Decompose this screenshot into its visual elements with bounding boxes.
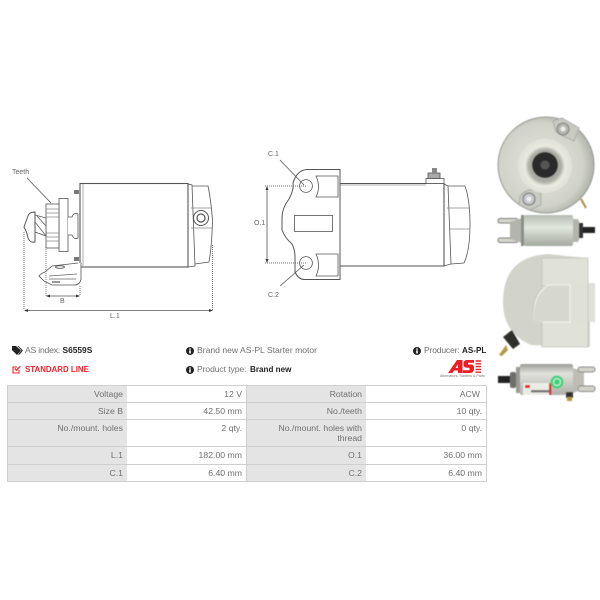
row: Voltage / Rotation: 12 V [224, 389, 242, 399]
technical drawing: front view with C.1, C.2 and O.1 dimensions [265, 160, 470, 286]
row: Size B / No./teeth [8, 403, 486, 419]
technical drawing: side view with teeth, B and L.1 dimensions [24, 178, 213, 312]
row: mount holes [8, 420, 486, 446]
dimension B [46, 247, 80, 298]
row: Voltage / Rotation [8, 386, 486, 402]
row: Size B / No./teeth: Size B [98, 406, 123, 416]
info row: AS index: AS index: [25, 345, 60, 355]
row: C.1 / C.2 [8, 465, 486, 481]
row: Voltage / Rotation: Rotation [330, 389, 362, 399]
info row: product type [186, 364, 292, 374]
row: Voltage / Rotation: Voltage [94, 389, 123, 399]
motor body [80, 184, 212, 267]
teeth leader line [27, 178, 51, 203]
label: B: B [60, 298, 65, 305]
label: Teeth: Teeth [12, 169, 29, 176]
label: L.1: L.1 [110, 313, 120, 320]
motor body [340, 184, 470, 266]
row: mount holes: No./mount. holes [57, 423, 123, 433]
mount hole C.2 [300, 257, 312, 269]
mounting flange [282, 170, 340, 280]
product photos column [496, 116, 596, 402]
info row: standard line: STANDARD LINE [25, 365, 89, 374]
info row: AS index: S6559S [62, 345, 92, 355]
photo: motor end view with pinion [498, 117, 594, 213]
label: O.1: O.1 [254, 220, 265, 227]
row: mount holes: thread [337, 433, 362, 443]
top terminal [426, 168, 444, 184]
row: L.1 / O.1: 182.00 mm [199, 450, 242, 460]
info row: producer: Producer: [424, 345, 459, 355]
row: L.1 / O.1: O.1 [348, 450, 362, 460]
row: C.1 / C.2: C.2 [348, 468, 362, 478]
info row: producer [413, 345, 486, 355]
row: Size B / No./teeth: No./teeth [327, 406, 362, 416]
pinion and teeth [24, 184, 80, 268]
dimension L.1 [24, 232, 213, 312]
leader lines C.1 and C.2 [280, 160, 304, 286]
dimension O.1 [265, 186, 306, 263]
row: C.1 / C.2: 6.40 mm [208, 468, 242, 478]
info row: producer: AS-PL [462, 346, 486, 355]
label: C.2: C.2 [268, 292, 279, 299]
row: C.1 / C.2: C.1 [109, 468, 123, 478]
icon: tags [12, 346, 23, 355]
photo: motor rear view with terminal [499, 254, 595, 356]
info row: AS index [12, 345, 92, 355]
mount hole C.1 [300, 180, 312, 192]
row: mount holes: No./mount. holes with [278, 423, 362, 433]
row: mount holes: 0 qty. [461, 423, 482, 433]
logo: AS: Alternators, Starters & Parts [440, 374, 485, 378]
specifications table [7, 385, 487, 482]
flange cutouts [294, 176, 338, 276]
row: C.1 / C.2: 6.40 mm [448, 468, 482, 478]
row: mount holes: 2 qty. [221, 423, 242, 433]
icon: checked box [12, 366, 21, 374]
row: Voltage / Rotation: ACW [460, 389, 480, 399]
info row: product type: Brand new [250, 365, 291, 374]
mounting bracket [39, 263, 81, 285]
row: L.1 / O.1: 36.00 mm [443, 450, 482, 460]
icon: info [413, 347, 421, 355]
icon: info [186, 366, 194, 374]
photo: motor side view, shaft right [498, 215, 595, 246]
photo: motor side view, shaft left with label [498, 364, 595, 401]
terminal bolt [194, 210, 208, 226]
row: Size B / No./teeth: 42.50 mm [203, 406, 242, 416]
row: Size B / No./teeth: 10 qty. [457, 406, 482, 416]
info row: product type: Product type: [197, 364, 246, 374]
info row: description: Brand new AS-PL Starter motor [197, 345, 317, 355]
logo: AS [440, 360, 485, 378]
icon: info [186, 347, 194, 355]
row: L.1 / O.1 [8, 447, 486, 464]
row: L.1 / O.1: L.1 [111, 450, 123, 460]
label: C.1: C.1 [268, 151, 279, 158]
